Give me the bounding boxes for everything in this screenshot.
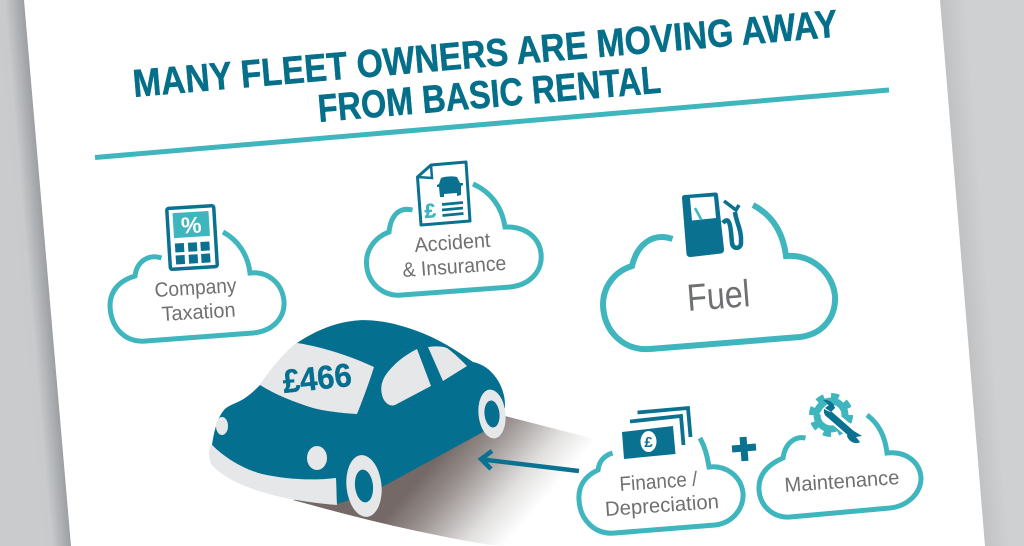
- rear wheel: [476, 388, 508, 440]
- headlights: [307, 446, 327, 470]
- label: [604, 468, 720, 521]
- cloud: company taxation: [110, 206, 284, 341]
- front wheel: [343, 453, 385, 519]
- label: Maintenance: [784, 466, 900, 497]
- icon: banknotes: £: [644, 434, 653, 451]
- cloud: fuel: [603, 192, 835, 349]
- title: FROM BASIC RENTAL: [316, 59, 663, 131]
- label: Company: [154, 274, 238, 302]
- label: [402, 229, 507, 282]
- icon: gear and wrench: [812, 396, 862, 443]
- windscreen with price: [260, 343, 374, 414]
- label: Fuel: [685, 273, 752, 320]
- cloud: finance and depreciation: [579, 408, 743, 533]
- cloud: accident and insurance: [366, 162, 541, 295]
- label: Depreciation: [604, 490, 720, 521]
- side windows: [381, 346, 467, 406]
- price: £466: [281, 356, 353, 400]
- label: Accident: [414, 229, 491, 257]
- icon: insurance document: [418, 162, 470, 225]
- car bumper: [209, 445, 337, 505]
- car: [209, 320, 508, 519]
- label: Taxation: [161, 299, 236, 326]
- icon: banknotes: [622, 408, 690, 459]
- icon: calculator: %: [180, 211, 202, 239]
- label: Finance /: [619, 468, 698, 496]
- icon: fuel pump: [682, 192, 741, 257]
- cloud: maintenance: [759, 396, 921, 517]
- label: & Insurance: [402, 252, 507, 282]
- label: [154, 274, 238, 326]
- shadow under car: [293, 416, 620, 545]
- icon: insurance document: £: [424, 200, 436, 223]
- car body: [212, 320, 505, 504]
- arrow: [481, 451, 579, 471]
- heading rule: [95, 90, 889, 158]
- icon: calculator: [167, 206, 217, 269]
- plus sign: [732, 437, 756, 461]
- car glyph: [437, 176, 463, 197]
